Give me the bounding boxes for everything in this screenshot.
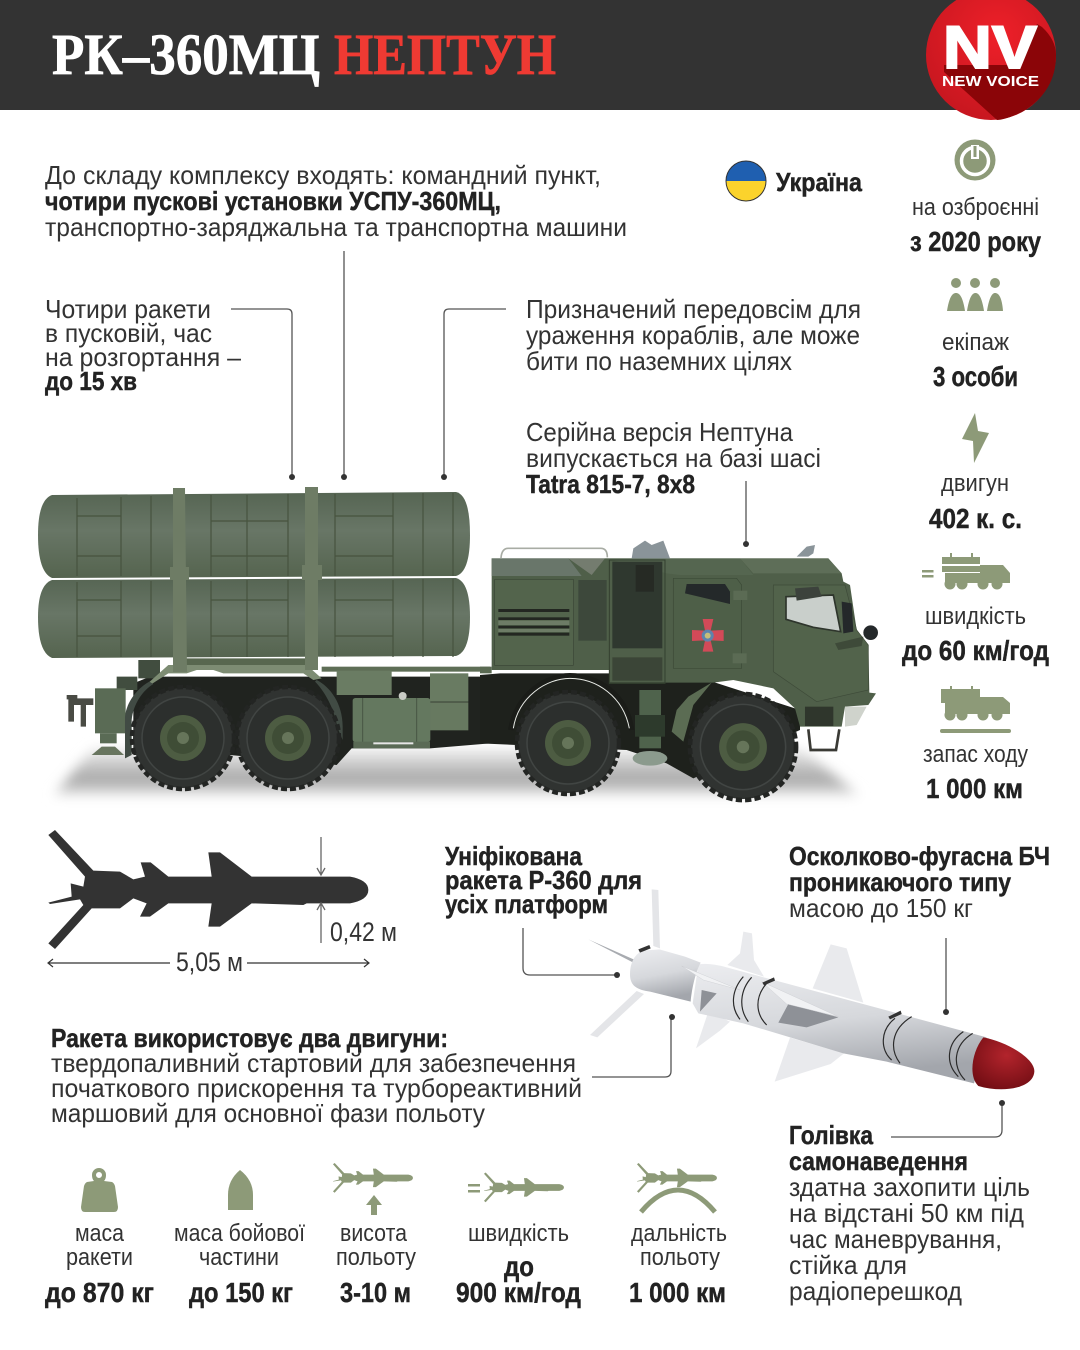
text: chassis: Tatra 815-7, 8х8	[526, 469, 695, 499]
stat: missile range: дальність	[631, 1220, 727, 1247]
stat: speed	[902, 603, 1049, 666]
text: unified missile: ракета Р-360 для	[445, 865, 642, 895]
stat: engine: 402 к. с.	[929, 503, 1022, 534]
dimension: length: 5,05 м	[176, 947, 243, 977]
stat: warhead mass: до 150 кг	[189, 1277, 293, 1308]
roof equipment	[632, 541, 815, 558]
icon: weight	[81, 1168, 118, 1212]
handrail	[501, 548, 607, 558]
text: unified missile: Уніфікована	[445, 841, 582, 871]
stat: in service: на озброєнні	[912, 194, 1039, 221]
nose cone	[972, 1037, 1034, 1089]
stat: missile mass: маса	[75, 1220, 125, 1247]
dimension: diameter: 0,42 м	[330, 917, 397, 947]
text: two engines: Ракета використовує два двигуни:	[51, 1023, 448, 1053]
icon: missile speed	[468, 1172, 564, 1202]
silhouette	[48, 830, 368, 949]
cab window	[786, 595, 841, 632]
mesh panels	[578, 560, 665, 683]
main body	[693, 964, 987, 1083]
fenders	[125, 680, 343, 758]
stat: missile mass: до 870 кг	[45, 1277, 154, 1308]
stabilizer	[67, 688, 126, 755]
wheels	[132, 687, 796, 800]
stat: range: запас ходу	[923, 741, 1028, 768]
text: unified missile	[445, 841, 642, 919]
mid wings	[696, 932, 863, 1082]
text: seeker: Голівка	[789, 1120, 873, 1150]
text: complex composition: транспортно-заряджальна та транспортна машини	[45, 212, 627, 242]
front panel	[773, 585, 868, 702]
stat: missile mass	[45, 1168, 154, 1308]
clips	[638, 945, 902, 1019]
stat: engine: двигун	[941, 470, 1009, 497]
icon: truck speed	[922, 553, 1010, 590]
cabin	[480, 541, 878, 778]
text: chassis	[526, 417, 821, 499]
side panel with louvres	[495, 579, 573, 665]
stat: missile speed: до	[504, 1251, 534, 1282]
missile silhouette with dimensions	[48, 830, 397, 977]
shock absorber	[633, 690, 667, 766]
stat row: missile specs	[45, 1163, 727, 1308]
frame top beam	[177, 658, 307, 666]
text: four missiles: в пусковій, час	[45, 318, 212, 348]
text: four missiles: до 15 хв	[45, 366, 137, 396]
text: four missiles	[45, 294, 242, 396]
stat: missile range: польоту	[640, 1244, 720, 1271]
label: Ukraine: Україна	[776, 167, 862, 197]
fuel tank	[353, 692, 430, 748]
roof plates	[492, 558, 842, 576]
stat: warhead mass: частини	[199, 1244, 279, 1271]
stat: in service: з 2020 року	[910, 226, 1041, 257]
title	[52, 22, 556, 87]
wheel arch	[511, 676, 632, 730]
stat column: vehicle specs	[902, 140, 1049, 804]
stat: engine	[929, 470, 1022, 534]
text: warhead: Осколково-фугасна БЧ	[789, 841, 1050, 871]
text: warhead	[789, 841, 1050, 923]
text: four missiles: на розгортання –	[45, 342, 242, 372]
text: two engines	[51, 1023, 582, 1128]
body rings	[733, 977, 973, 1080]
text: warhead: масою до 150 кг	[789, 893, 973, 923]
emblem: cross	[692, 619, 724, 652]
boxes and rail	[322, 667, 490, 730]
stat: crew: екіпаж	[942, 329, 1009, 356]
rack frames	[170, 487, 322, 672]
stat: range	[923, 741, 1028, 804]
callout lines to launcher	[231, 251, 749, 547]
rear upper blocks	[117, 660, 160, 690]
text: two engines: початкового прискорення та турбореактивний	[51, 1073, 582, 1103]
stat: warhead mass: маса бойової	[174, 1220, 305, 1247]
text: seeker: час маневрування,	[789, 1224, 1002, 1254]
callout lines to missile	[523, 928, 1005, 1137]
icon: Ukraine flag	[726, 161, 766, 201]
icon: missile range arc	[637, 1163, 717, 1212]
text: chassis: Серійна версія Нептуна	[526, 417, 793, 447]
stat: range: 1 000 км	[926, 773, 1023, 804]
dark undercarriage	[133, 677, 490, 765]
stat: missile speed	[456, 1172, 581, 1308]
text: chassis: випускається на базі шасі	[526, 443, 821, 473]
icon: missile up arrow	[333, 1163, 413, 1215]
stat: speed: до 60 км/год	[902, 635, 1049, 666]
title: НЕПТУН	[334, 22, 556, 87]
stat: missile range: 1 000 км	[629, 1277, 726, 1308]
icon: truck range	[940, 686, 1011, 733]
text: purpose	[526, 294, 861, 376]
ground shadow	[52, 748, 862, 797]
stat: flight altitude: висота	[340, 1220, 408, 1247]
stat: warhead mass	[174, 1170, 305, 1308]
booster	[630, 949, 701, 1002]
main body	[492, 558, 876, 727]
rail left of cabin	[480, 667, 492, 673]
text: purpose: бити по наземних цілях	[526, 346, 792, 376]
text: seeker: стійка для	[789, 1250, 907, 1280]
text: complex composition: До складу комплексу входять: командний пункт,	[45, 160, 601, 190]
stat: missile speed: швидкість	[468, 1220, 569, 1247]
text: two engines: твердопаливний стартовий для забезпечення	[51, 1048, 576, 1078]
text: seeker: на відстані 50 км під	[789, 1198, 1024, 1228]
logo: NV New Voice	[926, 0, 1056, 120]
text: purpose: ураження кораблів, але може	[526, 320, 860, 350]
stat: missile mass: ракети	[66, 1244, 133, 1271]
text: complex composition: чотири пускові установки УСПУ-360МЦ,	[45, 186, 501, 216]
text: seeker: радіоперешкод	[789, 1276, 962, 1306]
text: purpose: Призначений передовсім для	[526, 294, 861, 324]
stat: crew	[933, 329, 1018, 392]
text: warhead: проникаючого типу	[789, 867, 1011, 897]
fender strip	[672, 683, 712, 742]
icon: power	[954, 140, 996, 180]
stat: missile speed: 900 км/год	[456, 1277, 581, 1308]
text: unified missile: усіх платформ	[445, 889, 608, 919]
wing strakes	[682, 966, 838, 1017]
stat: crew: 3 особи	[933, 361, 1018, 392]
undercarriage	[480, 673, 800, 778]
rear chassis	[67, 658, 490, 765]
icon: engine bolt	[962, 413, 989, 463]
stat: flight altitude: польоту	[336, 1244, 416, 1271]
wing shadow	[700, 990, 838, 1027]
bumper details	[805, 707, 867, 750]
dimension: diameter	[317, 837, 397, 947]
stat: missile range	[629, 1163, 727, 1308]
logo: NV New Voice: NEW VOICE	[942, 73, 1039, 90]
text: two engines: маршовий для основної фази польоту	[51, 1098, 485, 1128]
stat: speed: швидкість	[925, 603, 1026, 630]
header bar	[0, 0, 1080, 110]
stat: flight altitude: 3-10 м	[340, 1277, 411, 1308]
mirrors and lamp	[795, 587, 878, 650]
launcher truck illustration	[38, 487, 878, 800]
icon: crew	[947, 278, 1003, 311]
door	[673, 578, 747, 668]
stat: flight altitude	[333, 1163, 416, 1308]
text: seeker: самонаведення	[789, 1146, 968, 1176]
text: seeker: здатна захопити ціль	[789, 1172, 1030, 1202]
logo: NV New Voice: NV	[943, 14, 1037, 81]
text: complex composition	[45, 160, 627, 242]
dimension: length	[48, 947, 369, 977]
title: РК–360МЦ	[52, 22, 320, 87]
missile containers	[38, 492, 470, 658]
missile illustration	[588, 889, 1034, 1089]
stat: in service	[910, 194, 1041, 257]
rear fins	[588, 889, 660, 1037]
icon: warhead	[228, 1170, 253, 1210]
text: four missiles: Чотири ракети	[45, 294, 211, 324]
text: seeker	[789, 1120, 1030, 1306]
